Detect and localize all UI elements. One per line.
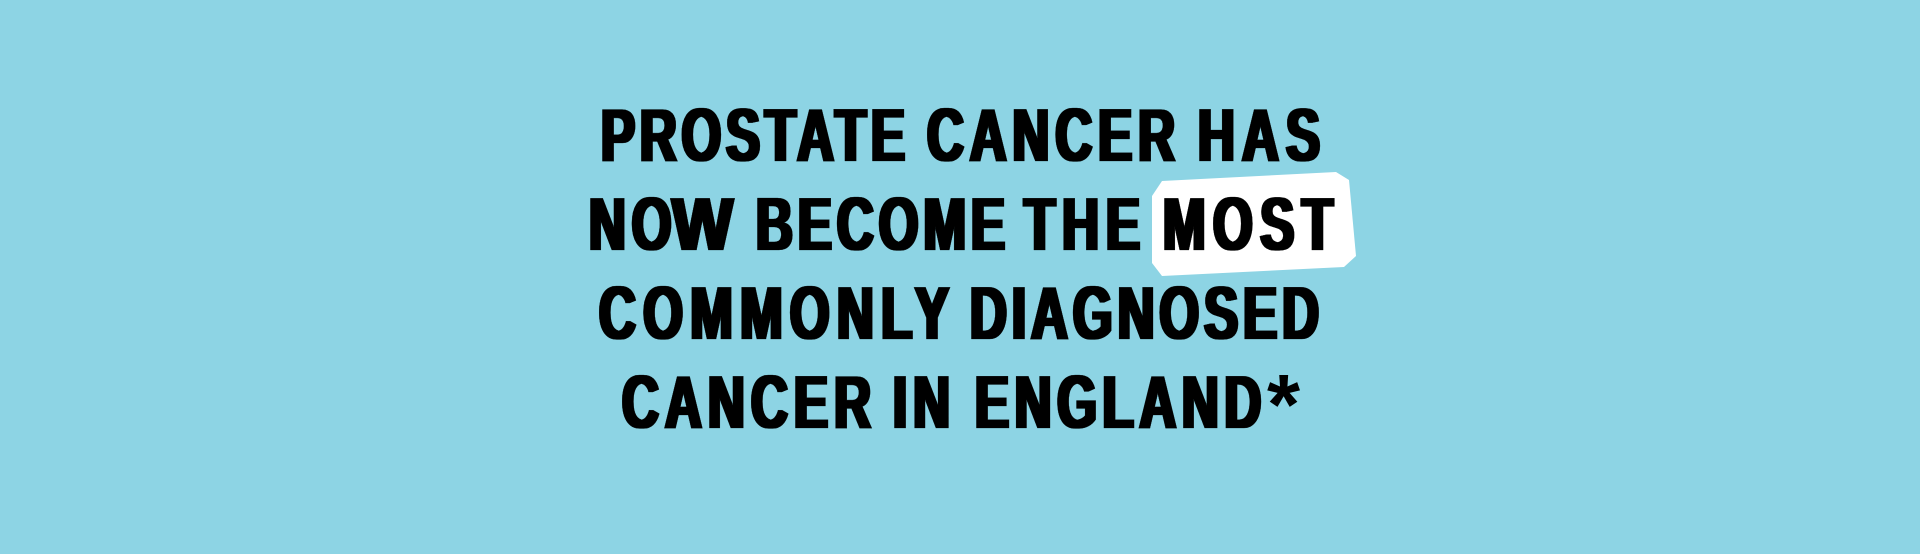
headline line 3: [599, 271, 1319, 355]
headline line 2: MOST: [1163, 182, 1333, 266]
headline line 2: W: [672, 182, 733, 266]
headline: [589, 93, 1333, 453]
headline line 4: [622, 358, 1300, 453]
headline line 2: [589, 182, 1333, 266]
headline line 1: HAS: [1198, 93, 1320, 177]
headline line 4: *: [1267, 358, 1300, 453]
highlight: white shape behind MOST: [1152, 172, 1356, 276]
headline line 4: IN: [893, 360, 950, 444]
headline line 1: [601, 93, 1320, 177]
headline line 1: CANCER: [927, 93, 1175, 177]
headline line 2: NO: [589, 182, 671, 266]
headline line 2: BECOME: [756, 182, 1005, 266]
headline line 1: PROSTATE: [601, 93, 905, 177]
headline line 4: CANCER: [622, 360, 871, 444]
headline line 2: THE: [1024, 182, 1140, 266]
headline line 4: ENGLAND: [975, 360, 1261, 444]
headline line 3: DIAGNOSED: [970, 271, 1319, 355]
headline line 3: COMMONLY: [599, 271, 949, 355]
